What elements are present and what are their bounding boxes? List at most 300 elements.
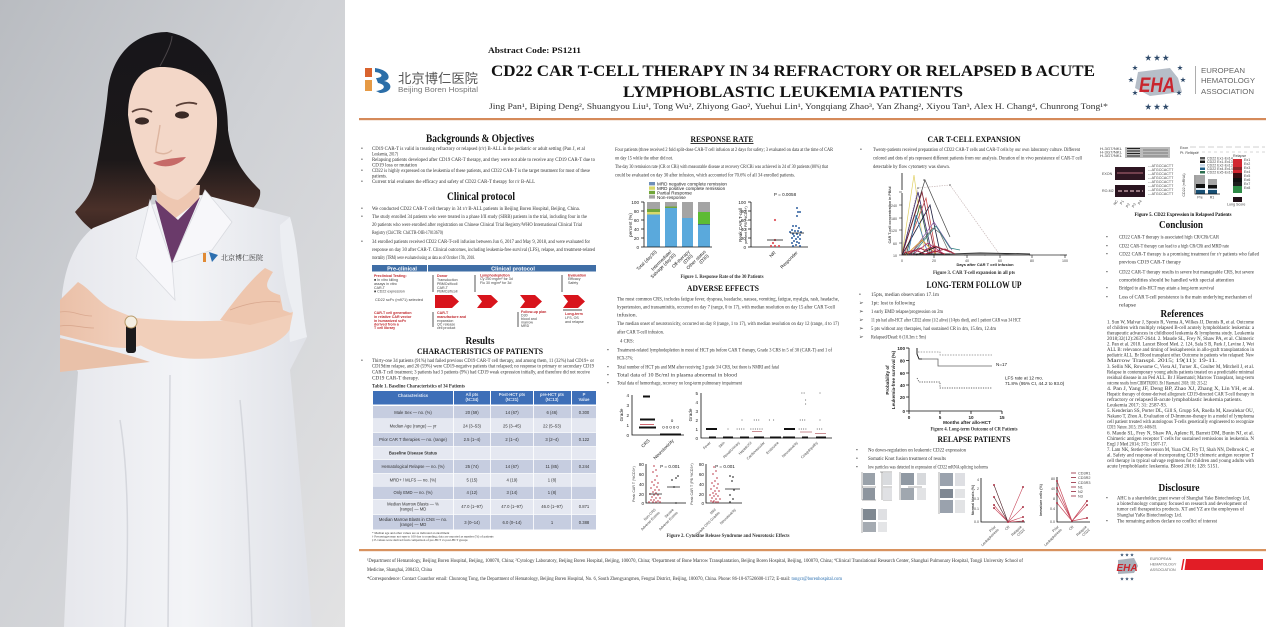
panel: disclosure: tumor cell therapeutics products. XT and YZ are the employees of [1117,506,1244,512]
chart: immature cells paired lines with legend: 40 [1051,487,1055,491]
chart: immature cells paired lines with legend: N1 [1078,486,1083,490]
hospital logo [365,68,479,94]
panel: relapse patients: • [856,456,858,462]
results heading [417,336,543,356]
chart: normal blasts paired lines: 4 [977,478,979,482]
panel: clinical protocol: • [361,239,363,245]
chart: leukemia-free survival curve: 15 [999,415,1005,420]
panel: relapse patients: • [856,448,858,454]
chart: symptom grades dot plot B: •••• [798,427,808,431]
chart: immature cells paired lines with legend: Immature cells (%) [1039,483,1043,516]
chart: CAR T-cell expansion spaghetti plot: 60 [893,242,897,246]
protocol flow diagram: in relative CAR vector [374,315,412,319]
chart: CRS grade dot plot A: 0 [626,433,629,438]
panel: references: Leukemia 2017; 31: 2587-93. [1107,402,1167,408]
chart: symptom grades dot plot B: Neurotoxicity [781,441,799,458]
table: baseline characteristics: 1 [551,520,554,525]
chart: normal blasts paired lines: Normal blasts (%) [971,484,975,515]
panel: response rate: RESPONSE RATE [690,134,754,144]
chart: CRS grade dot plot A [619,393,684,460]
chart: normal blasts paired lines: CD22 [1016,528,1026,537]
chart: normal blasts paired lines: 0.3 [974,497,979,501]
chart: peak CAR T by toxicity D: 60 [699,472,704,477]
panel: long-term follow up: ➢ [859,326,864,332]
panel: references: Nakano T, Zhou A. Evaluation of D-Immuno-therapy in a model of lymphoma [1107,412,1255,420]
table: baseline characteristics: 1 (8) [548,490,557,495]
figure 5: stacked isoform bars and heat map: Ex6 [1244,178,1250,182]
panel: references: cell patient treated with autologous T-cells genetically engineered to recognize [1107,419,1255,425]
caption: figure 1: Figure 1. Response Rate of the 30 Patients [680,275,764,280]
chart: symptom grades dot plot B: •••• [736,427,746,431]
chart: stacked bars of response: 40 [634,227,639,232]
table: baseline characteristics: (range) — MD [400,522,426,527]
chart: symptom grades dot plot B: ••• [800,418,806,422]
panel: adverse effects: • [607,364,609,370]
chart: peak CAR T by toxicity C: Adverse Events [658,511,679,532]
panel: conclusion: CD22 CAR-T therapy results in severe but manageable CRS, but severe [1119,270,1255,276]
table: baseline characteristics: (N=21) [506,397,519,402]
table: baseline characteristics: 11 (85) [546,464,559,469]
chart: CAR T-cell expansion spaghetti plot: 60 [998,259,1002,263]
table: baseline characteristics: Median Age (range) — yr [390,424,437,428]
panel: references: 3. Sellin NK, Rowsome C, Viera AJ, Turner JL, Coulter M, Mitchell J, et al. [1107,364,1254,370]
chart: CRS grade dot plot A: 2 [626,413,629,418]
panel: conclusion: Loss of CAR T-cell persistence is the main underlying mechanism of [1119,294,1252,300]
figure 5: stacked isoform bars and heat map: Relapse [1233,154,1246,158]
chart: symptom grades dot plot B: 5 [695,391,698,396]
EHA logo: ★ [1128,77,1134,84]
panel: references: 1. Sun W, Malvar J, Sposto R, Verma A, Wilkes JJ, Dennis R, et al. Outcome [1107,320,1255,326]
figure 5: stacked isoform bars and heat map: Pt. Relapse [1180,151,1199,155]
footer EHA logo and red banner: EUROPEAN [1150,557,1172,561]
table: baseline characteristics: 4 (19) [507,478,518,482]
results heading: CHARACTERISTICS OF PATIENTS [417,346,543,356]
protocol flow diagram: marrow [521,320,533,324]
panel: references: acute lymphoblastic leukemia. Blood 2016; 128: 5151. [1107,464,1219,470]
chart: symptom grades dot plot B: ••• [754,418,760,422]
table: baseline characteristics: P [583,392,586,397]
EHA logo: ★ ★ ★ [1145,54,1169,62]
hospital logo: Beijing Boren Hospital [398,87,479,94]
chart: symptom grades dot plot B: • [819,418,821,422]
chart: immature cells paired lines with legend: CD3R3 [1078,481,1090,485]
panel: clinical protocol: Registry (ChiCTR: ChiCTR-OIB-17013670) [372,229,443,236]
chart: CRS grade dot plot A: Grade [619,408,624,421]
chart: immature cells paired lines with legend: 80 [1051,477,1055,481]
panel: references: cell therapy in typical salvage regimens for children and young adults with [1107,457,1254,464]
panel: conclusion: relapse [1119,302,1137,308]
panel: disclosure: Shanghai YaKe Biotechnology Ltd. [1117,512,1182,518]
caption: figure 4: Figure 4. Long-term Outcome of CR Patients [930,428,1018,432]
EHA logo: EUROPEAN [1201,68,1245,75]
figure 5: stacked isoform bars and heat map: Ex5 [1244,174,1250,178]
protocol flow diagram: assays in vitro [374,282,397,286]
chart: stacked bars of response: 60 [634,218,639,223]
chart: symptom grades dot plot B: Renal/Urinary [722,441,741,459]
panel: disclosure: Disclosure [1158,483,1200,494]
chart: leukemia-free survival curve: Probability of [885,365,890,395]
results text: • [361,358,363,364]
chart: symptom grades dot plot B: • [819,391,821,395]
table: baseline characteristics: 14 (67) [505,410,519,415]
chart: stacked bars of response: (D30) [682,253,694,265]
figure 5: stacked isoform bars and heat map: CD22 Ex2-Ex13 [1207,164,1233,168]
table: baseline characteristics: 3 (0–14) [464,520,480,525]
panel: backgrounds and objectives: CD19 loss or mutation [372,162,417,168]
table: baseline characteristics: 6.0 (0–14) [502,520,522,525]
panel: relapse patients: No down-regulation on leukemic CD22 expression [868,448,966,454]
protocol flow diagram: and relapse [565,320,584,324]
chart: stacked bars of response: MRD positive complete remission [657,186,726,191]
panel: adverse effects: Total number of HCT pts and MM after receiving 3 grade 3/4 CRS, but there is NMRI and fatal [617,364,779,370]
panel: clinical protocol: • [361,214,363,220]
chart: normal blasts paired lines: CR [1004,525,1011,531]
figure 5: stacked isoform bars and heat map: CD22 (mRNA) [1182,173,1186,197]
footer affiliations: Medicine, Shanghai, 200433, China [367,567,432,573]
table: baseline characteristics: 14 (67) [505,464,519,469]
flow cytometry panels [862,472,965,533]
panel: references: refractory or relapsed B-acute lymphoblastic leukemia patients. [1107,396,1242,403]
panel: adverse effects: hypertension, and transaminitis, occurred on day 7 (range, 0 to 17), with median resolution on day 15 after CAR T-cell [617,304,835,310]
figure 5: western blot and gel images: P3 [1131,202,1137,208]
table: baseline characteristics: Male Sex — no. (%) [394,410,432,415]
panel: backgrounds and objectives: • [361,168,363,174]
figure 5: stacked isoform bars and heat map: CD22 Ex1-Ex13 [1207,160,1233,164]
table: baseline characteristics: 47.0 (1–97) [461,504,483,509]
panel: conclusion: • [1106,270,1108,276]
chart: symptom grades dot plot B: Skin [718,441,726,449]
protocol flow diagram: Pre-clinical [387,266,417,272]
footer EHA logo and red banner: ASSOCIATION [1150,568,1176,572]
chart: CAR T-cell expansion spaghetti plot: 40 [965,259,969,263]
chart: symptom grades dot plot B: Coagulopathy [800,441,819,459]
protocol flow diagram: ■ In vitro killing [374,278,398,282]
panel: response rate: Four patients (three received 2 fold split-dose CAR-T cell infusion at 2 days for safety; 3 evaluated on data at the time of CAR [615,146,833,153]
figure 5: western blot and gel images: NC [1113,199,1119,206]
results text: Table 1. Baseline Characteristics of 34 Patients [372,384,465,390]
panel: conclusion [1106,220,1259,308]
chart: stacked bars of response: Other status [685,249,707,270]
chart: peak CAR T by toxicity D: 0 [701,501,704,506]
chart: CAR T-cell expansion spaghetti plot [888,173,1068,267]
panel: backgrounds and objectives: • [361,146,363,152]
protocol flow diagram: QC release [437,322,455,326]
panel: CAR T-cell expansion: detectable by flow cytometry was shown. [873,163,950,170]
table: baseline characteristics: Characteristics [398,393,429,398]
panel: references: 5. Kenderian SS, Porter DL, Gill S, Grupp SA, Ruella M, Kawalekar OU, [1107,408,1255,414]
results heading: Results [466,336,494,347]
chart: peak CAR T by toxicity D [690,462,742,536]
chart: symptom grades dot plot B: Grade [688,408,693,421]
chart: peak CAR T by toxicity C: Severe [664,508,675,519]
chart: symptom grades dot plot B: • [805,398,807,402]
figure 5: western blot and gel images: ---ATGCCACTT [1148,172,1174,176]
chart: leukemia-free survival curve: 5 [939,415,942,420]
table: baseline characteristics: 4 (12) [467,490,478,495]
chart: symptom grades dot plot B: Cardiovascular [746,440,766,461]
table: baseline characteristics: * Median age and other values are as indicated at enrollment [372,531,449,535]
chart: stacked bars of response: 0 [636,245,639,250]
chart: symptom grades dot plot B: Fever [702,440,712,450]
figure 5: western blot and gel images: ---ATGCCACTT [1148,180,1174,184]
chart: leukemia-free survival curve: LFS rate at 12 mo. [1005,376,1043,380]
poster title: CD22 CAR T-CELL THERAPY IN 34 REFRACTORY OR RELAPSED B ACUTE [491,63,1095,80]
protocol flow diagram: CAR-T [374,286,386,290]
panel: conclusion: CD22 CAR-T therapy is associated high CR/CRi/CAR [1119,234,1219,240]
panel: adverse effects: Total data of hemorrhage, recovery no long-term pulmonary impairment [617,380,742,386]
protocol flow diagram: cell product [437,326,455,330]
panel: clinical protocol: • [361,206,363,212]
chart: symptom grades dot plot B: Endocrine [765,441,780,455]
panel: references: Engl J Med 2014; 371: 1507-17. [1107,442,1167,448]
panel: references: Marrow Transpl. 2015; 19(11): 19-11. [1107,357,1217,364]
chart: CAR T-cell expansion spaghetti plot: Days after CAR T cell infusion [956,262,1014,267]
chart: scatter of peak CAR T-cell percent: 60 [741,218,746,223]
panel: clinical protocol: response on day 30 after CAR-T. Clinical outcomes, including leukemia-free survival (LFS), relapse, and treatment-related [372,246,595,253]
protocol flow diagram: Evaluation [568,274,586,278]
chart: peak CAR T by toxicity D: 80 [699,462,704,467]
table: baseline characteristics: pre-HCT pts [540,392,565,397]
EHA logo: HEMATOLOGY [1201,78,1255,85]
chart: symptom grades dot plot B: Hepatic/GI [738,441,753,456]
table: baseline characteristics: 25 (3–45) [503,424,522,428]
chart: scatter of peak CAR T-cell percent: 40 [741,227,746,232]
table: baseline characteristics: Post-HCT pts [499,392,526,397]
figure 5: stacked isoform bars and heat map: Ex3 [1244,166,1250,170]
panel: backgrounds and objectives: Backgrounds & Objectives [426,133,534,145]
chart: peak CAR T by toxicity C: Non-CRS [643,507,657,522]
protocol flow diagram: Transduction [437,278,458,282]
caption: figure 3: Figure 3. CAR T-cell expansion in all pts [933,271,1015,276]
chart: peak CAR T by toxicity C: 20 [639,492,644,497]
chart: CRS grade dot plot A: 1 [626,423,629,428]
protocol flow diagram: derived from a [374,322,400,326]
chart: scatter of peak CAR T-cell percent: Peak CAR T-cell [738,208,743,242]
chart: stacked bars of response: 80 [634,209,639,214]
chart: immature cells paired lines with legend: 8 [1053,497,1055,501]
chart: CRS grade dot plot A: CRS [640,438,651,449]
chart: CRS grade dot plot A: 3 [626,403,629,408]
figure 5: stacked isoform bars and heat map: Ex4 [1244,170,1250,174]
panel: clinical protocol: 34 enrolled patients received CD22 CAR-T-cell infusion between Jun 6, 2017 and May 9, 2018, and were evaluated for [372,238,590,245]
panel: disclosure: • [1106,518,1108,524]
chart: symptom grades dot plot B: 1 [695,427,698,432]
panel: disclosure: • [1106,496,1108,502]
panel: references: pediatric ALL. Br Blood transplant other. Outcome in patients who relapsed: New [1107,352,1254,358]
chart: normal blasts paired lines: Prior [989,524,997,533]
figure 5: western blot and gel images: ---ATGCCACTT [1148,168,1174,172]
table: baseline characteristics: 24 (3–53) [463,424,482,428]
footer EHA logo and red banner: EHA [1116,563,1138,574]
chart: peak CAR T by toxicity C: P = 0.001 [660,464,680,469]
protocol flow diagram: PBMCs/ficoll [437,290,458,294]
protocol flow diagram: Donor [437,274,448,278]
chart: immature cells paired lines with legend: N2 [1078,490,1083,494]
protocol flow diagram: in humanized scFv [374,319,406,323]
chart: leukemia-free survival curve: 40 [900,383,905,388]
chart: immature cells paired lines with legend: CD22 [1081,528,1091,537]
chart: normal blasts paired lines: Leukapheresis [980,528,1000,547]
table: baseline characteristics: (range) — MD [400,506,426,512]
panel: conclusion: • [1106,234,1108,240]
chart: symptom grades dot plot B: • [727,427,729,431]
chart: scatter of peak CAR T-cell percent: 100 [738,200,746,205]
chart: peak CAR T by toxicity C: 0 [641,501,644,506]
panel: backgrounds and objectives: patients. [372,174,387,180]
figure 5: western blot and gel images [1100,147,1174,208]
results text: CAR-T cell treatment; 3 patients had 3 patients (9%) had CD19 weak expression initially, and therefore did not receive [372,368,591,376]
panel: references: References [1160,309,1204,320]
EHA logo: ★ [1177,65,1183,72]
portrait photo of doctor in white coat [0,0,345,627]
panel: relapse patients: • [856,464,858,470]
panel: clinical protocol: We conducted CD22 CAR-T cell therapy in 34 r/r B-ALL patients in Beijing Boren Hospital, Beijing, China. [372,206,580,212]
table: baseline characteristics: Median Marrow Blasts — % [387,502,439,506]
chart: immature cells paired lines with legend: CR [1068,525,1075,531]
protocol flow diagram: Clinical protocol [491,266,535,272]
chart: leukemia-free survival curve: 10 [968,415,974,420]
chart: symptom grades dot plot B: • • [801,391,805,395]
table: baseline characteristics: 22 (5–53) [543,424,562,428]
panel: adverse effects: infusion. [617,312,637,318]
protocol flow diagram: Flu 30 mg/m² for 3d [480,281,511,285]
chart: symptom grades dot plot B: • [741,418,743,422]
table: baseline characteristics [372,391,596,542]
panel: long-term follow up: 1 early EMD relapse/progression on 2m [871,309,944,315]
panel: adverse effects: 4 CRS: [620,338,634,344]
chart: CAR T-cell expansion spaghetti plot: 240 [891,204,897,208]
panel: adverse effects: • [607,348,609,354]
table: baseline characteristics: Median Marrow Blasts in CNS — no. [379,517,447,522]
panel: long-term follow up: 5 pts without any therapies, had sustained CR in 4m, 15.6m, 12.4m [871,326,997,332]
panel: CAR T-cell expansion: Twenty-patients received preparation of CD22 CAR-T cells and CAR-T cells by our own laboratory culture. Different [873,146,1080,153]
table: baseline characteristics: Value [579,397,590,402]
protocol flow diagram: D30 [521,314,528,318]
chart: stacked bars of response: 100 [631,200,639,205]
figure 5: western blot and gel images: H-3G7/NKL [1100,147,1122,151]
chart: stacked bars of response: Non-response [657,195,686,200]
panel: relapse patients: Somatic Knot fusion treatment of results [868,455,946,462]
protocol flow diagram: T cell library [374,326,395,330]
table: baseline characteristics: 47.0 (1–97) [501,504,523,509]
EHA logo [1128,54,1255,111]
panel: conclusion: previous CD19 CAR-T therapy [1119,260,1181,266]
table: baseline characteristics: 25 (74) [465,464,479,469]
panel: conclusion: comorbidities should be handled with special attention [1119,278,1234,284]
panel: conclusion: CD22 CAR-T therapy can lead to a high CR/CRi and MRD rate [1119,244,1229,250]
panel: conclusion: • [1106,252,1108,258]
hospital logo: 北京博仁医院 [398,71,478,86]
panel: relapse patients: low particles was detected in expression of CD22 mRNA splicing isoforms [868,464,988,470]
figure 5: stacked isoform bars and heat map [1180,146,1265,206]
figure 5: stacked isoform bars and heat map: Ex1 [1244,158,1250,162]
figure 5: stacked isoform bars and heat map: Ex2 [1244,162,1250,166]
chart: immature cells paired lines with legend: CD3R1 [1078,472,1090,476]
panel: CAR T-cell expansion: • [860,147,862,153]
panel: adverse effects: The most common CRS, includes fatigue fever, dyspnea, headache, nausea, vomiting, fatigue, myalgia, rash, headache, [617,296,840,302]
panel: references: residual disease in an Ped ALL. Br J Haematol; Marrow Transplant, long-term [1107,375,1255,381]
chart: leukemia-free survival curve: 0 [902,409,905,414]
chart: peak CAR T by toxicity C: Peak CAR T (%CD3+) [632,466,636,502]
chart: scatter of peak CAR T-cell percent: 80 [741,209,746,214]
chart: stacked bars of response: Salvage (day30) [650,252,677,279]
chart: scatter of peak CAR T-cell percent [738,192,808,270]
panel: clinical protocol: 20 patients who were enrolled after registration on Chinese Clinical Trial Registry/WHO International Clinical Trial [372,221,582,228]
chart: CAR T-cell expansion spaghetti plot: 100 [1062,259,1068,263]
chart: CRS grade dot plot A: ooooo [662,424,680,430]
panel: references: 4. Pan J, Yang JF, Deng BP, Zhao XJ, Zhang X, Lin YH, et al. [1107,386,1254,392]
chart: leukemia-free survival curve: 80 [900,358,905,364]
panel: disclosure: The remaining authors declare no conflict of interest [1117,518,1217,524]
figure 5: western blot and gel images: ---ATGCCACTT [1148,176,1174,180]
figure 5: western blot and gel images: H-3G7/NKL [1100,150,1122,154]
chart: leukemia-free survival curve: 60 [900,371,905,376]
figure 5: stacked isoform bars and heat map: CD22 Ex5-Ex10 [1207,170,1233,174]
chart: peak CAR T by toxicity D: Peak CAR T (PB %CD3+) [690,463,694,505]
figure 5: stacked isoform bars and heat map: CD22 Ex1-Ex14 [1207,156,1233,160]
panel: references: 2. Pan et al. 2018. Lancet Blood Med. 2. 124, Sala S B, Park J, Levine J, Wei [1107,342,1254,348]
chart: peak CAR T by toxicity C [632,462,686,532]
panel: CAR T-cell expansion: CAR T-CELL EXPANSION [928,134,1021,144]
chart: stacked bars of response: Partial Response [657,190,692,196]
figure 5: western blot and gel images: EXON [1102,172,1113,176]
panel: clinical protocol: Clinical protocol [447,191,515,203]
chart: symptom grades dot plot B: 0 [695,436,698,441]
panel: response rate [615,134,833,178]
chart: leukemia-free survival curve: 20 [900,395,905,400]
panel: backgrounds and objectives: Relapsing patients developed after CD19 CAR-T therapy, and they were not able to receive any CD19 CAR-T due to [372,156,595,163]
chart: immature cells paired lines with legend: Leukapheresis [1043,528,1063,547]
chart: peak CAR T by toxicity D: Grade CRS Grades [696,511,721,536]
panel: references: 2018;32(12):2637-2644. 2. Maude SL, Frey N, Shaw PA, et al. Chimeric [1107,335,1255,342]
chart: stacked bars of response: Intermediate/ [650,249,673,272]
chart: CAR T-cell expansion spaghetti plot: 80 [1030,259,1034,263]
figure 5: stacked isoform bars and heat map: R1 [1210,196,1214,200]
panel: references: al. Safety and response of incorporating CD19 chimeric antigen receptor T [1107,452,1255,458]
chart: normal blasts paired lines: Relapse [1011,525,1023,537]
panel: backgrounds and objectives: CD19 CAR-T is valid in treating refractory or relapsed (r/r) B-ALL in the pediatric or adult setting (Pan J, et al [372,145,585,152]
chart: normal blasts paired lines: 0.0 [974,520,979,524]
panel: clinical protocol: mortality (TRM) were evaluated using as data as of October 17th, 2018. [372,254,475,261]
EHA logo: EHA [1139,74,1175,97]
chart: CRS grade dot plot A: o [671,418,674,423]
chart: CRS grade dot plot A: 4 [626,393,629,398]
protocol flow diagram: Long-term [565,312,583,316]
panel: long-term follow up: 11 pts had allo-HCT after CD22 alone (1/2 alive) (1/4pts died), and 1 patient CAR was 34 HCT [871,316,1022,324]
figure 5: stacked isoform bars and heat map: Pre [1197,196,1203,200]
EHA logo: ★ [1180,77,1186,84]
panel: backgrounds and objectives: • [361,179,363,185]
figure 5: western blot and gel images: P1 [1119,200,1125,205]
panel: references: of children with multiply relapsed B-cell acutely lymphoblastic leukemia: a [1107,324,1255,331]
chart: stacked bars of response: Off-therapy [671,249,691,269]
chart: leukemia-free survival curve: N=17 [996,362,1008,367]
chart: peak CAR T by toxicity D: 20 [699,492,704,497]
protocol flow diagram: blood and [521,317,537,321]
protocol flow diagram: Follow-up plan [521,310,546,314]
figure 5: western blot and gel images: P4 [1137,200,1143,205]
panel: response rate: could be evaluated on day 30 after infusion, which accounted for 70.6% of all 34 enrolled patients. [615,172,795,178]
table: baseline characteristics: 0.871 [579,504,590,509]
panel: long-term follow up: ➢ [859,334,864,340]
panel: disclosure: a biotechnology company focused on research and development of [1117,500,1247,507]
table: baseline characteristics: 3 (2–4) [545,437,559,442]
chart: immature cells paired lines with legend: N3 [1078,494,1083,498]
chart: scatter of peak CAR T-cell percent: NR [768,250,777,258]
protocol flow diagram: Efficacy [568,277,581,281]
chart: leukemia-free survival curve: 100 [897,346,905,351]
chart: leukemia-free survival curve [885,346,1065,425]
